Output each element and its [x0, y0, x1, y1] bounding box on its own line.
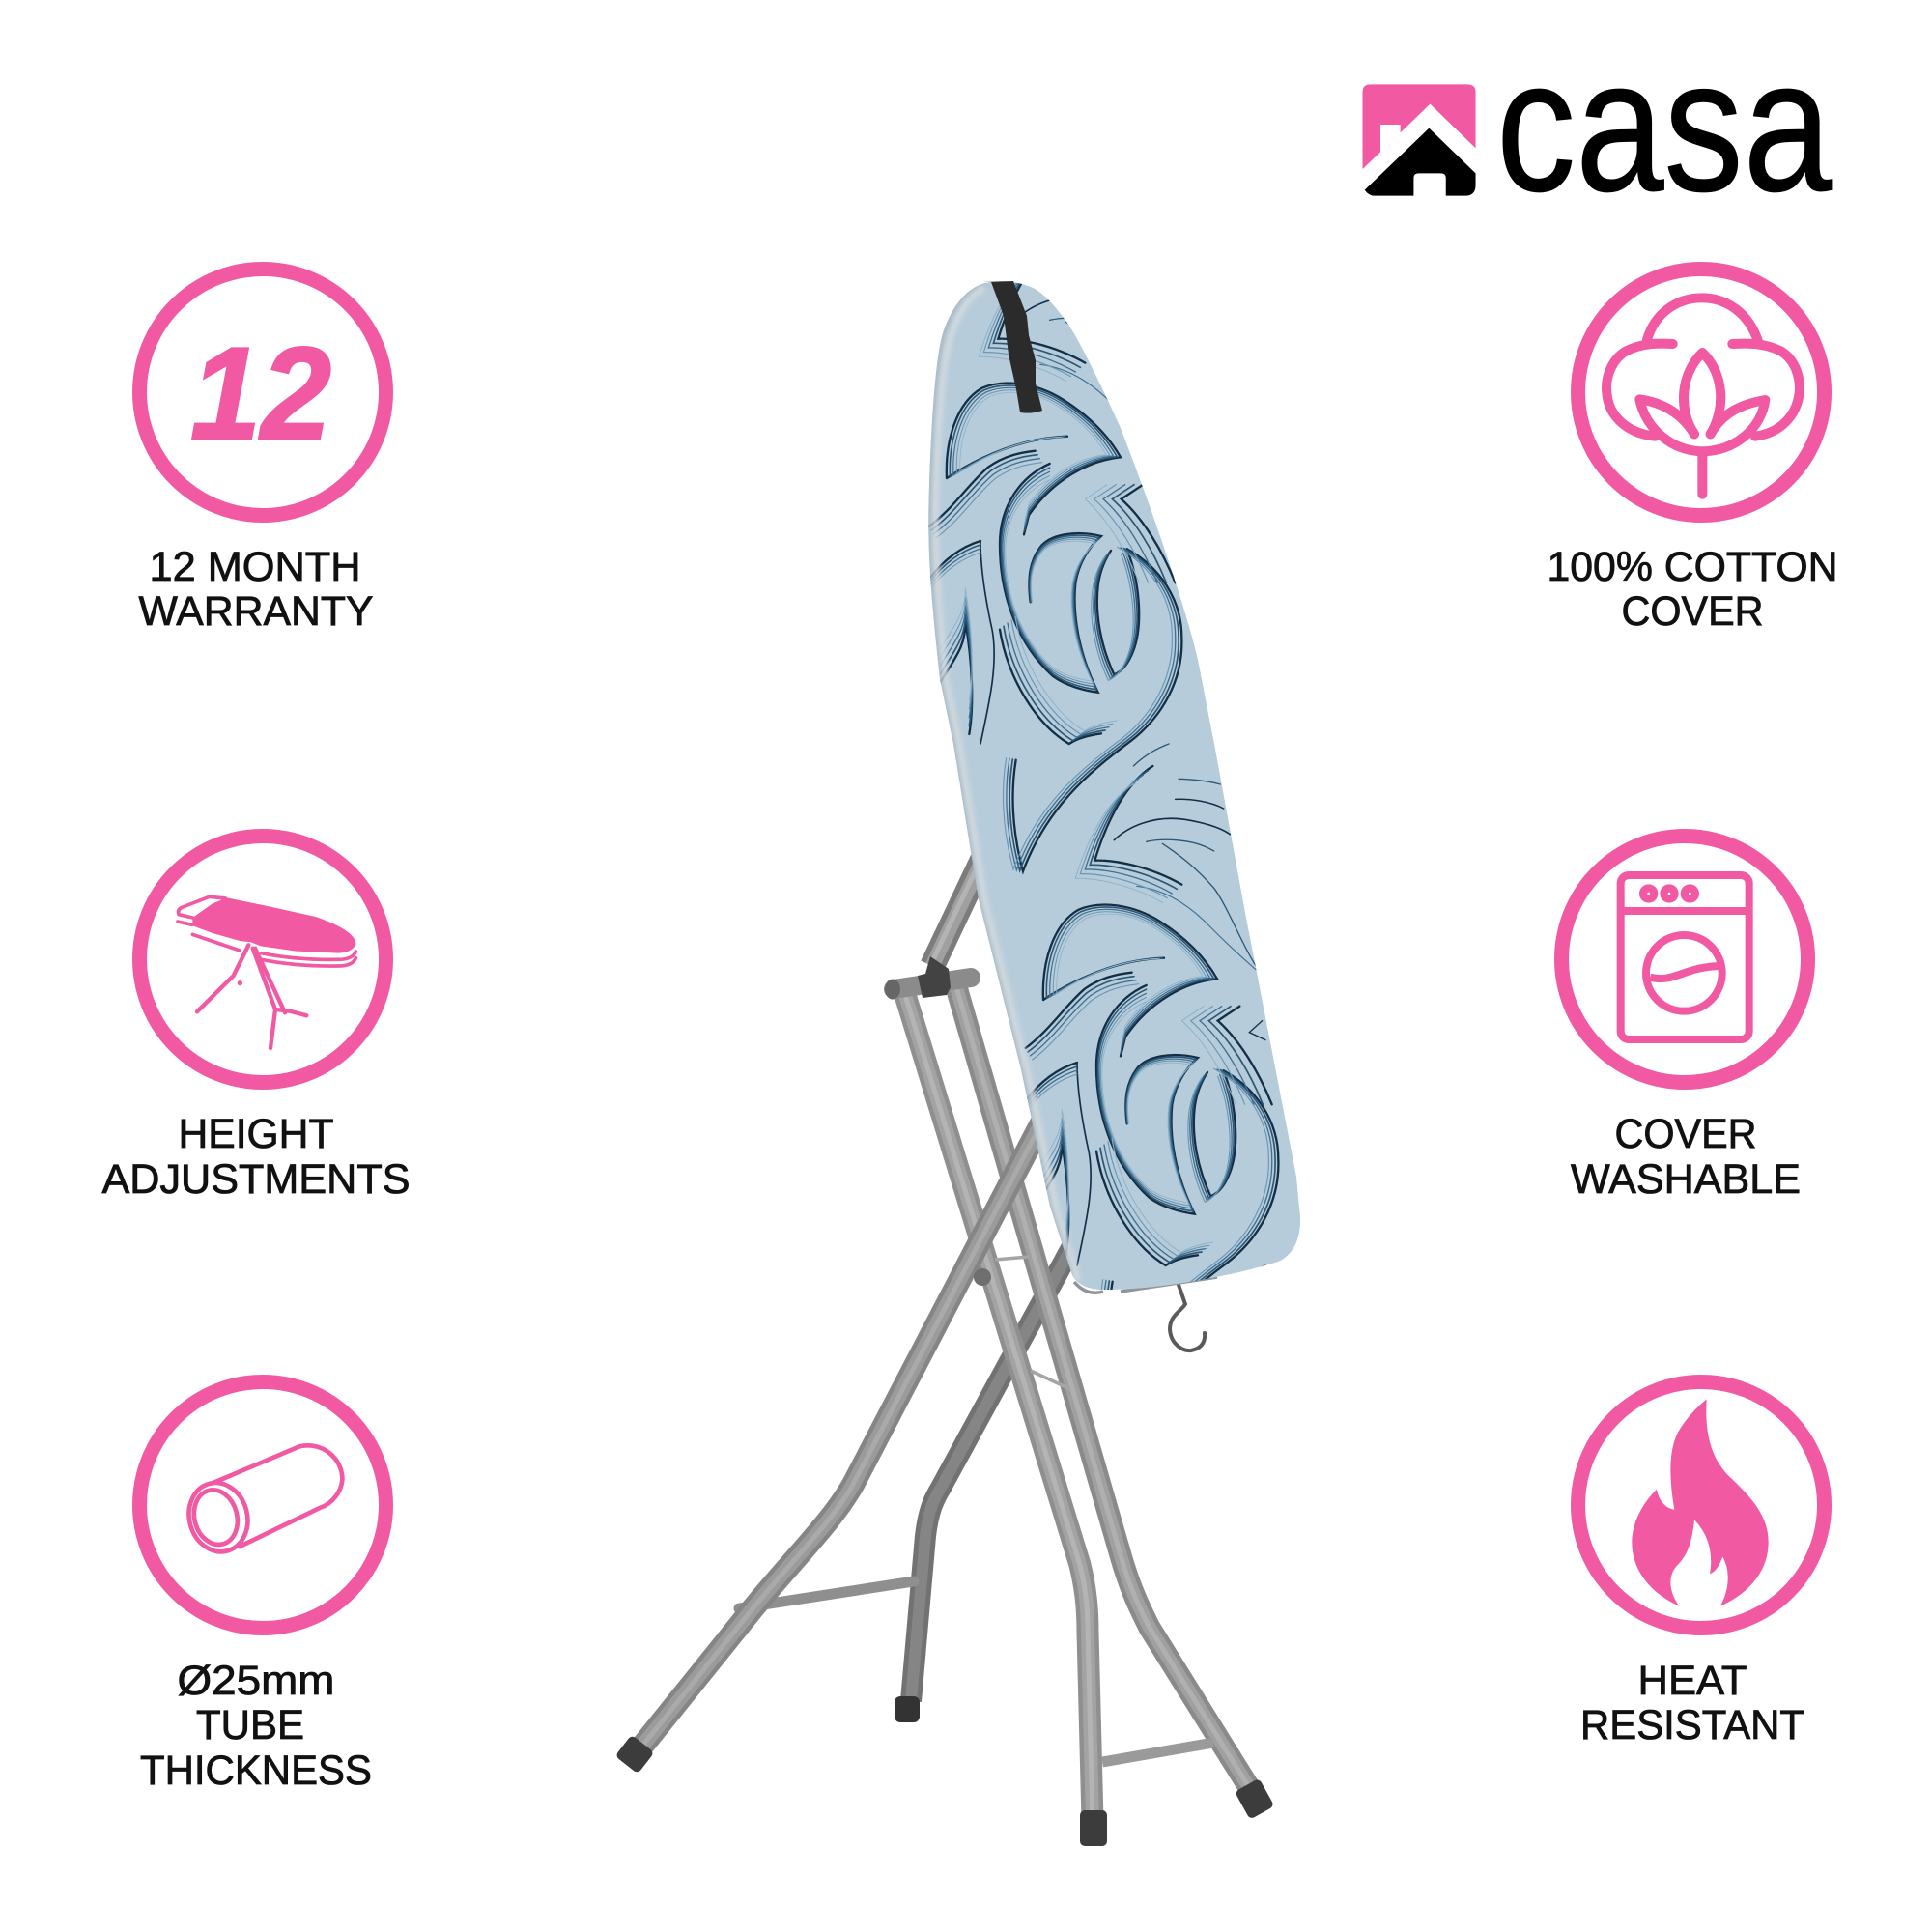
stand: front diagonal leg	[643, 1092, 1058, 1745]
stand: top cross bar	[885, 978, 971, 999]
label: HEAT	[1638, 1658, 1747, 1704]
icon: ironing board	[139, 837, 386, 1082]
foot: left	[615, 1735, 654, 1774]
strap	[983, 281, 1042, 413]
feature: cover washable	[1561, 837, 1808, 1203]
feature: 12 month warranty	[139, 269, 386, 635]
logo icon: house	[1363, 84, 1476, 196]
label: Ø25mm	[178, 1658, 334, 1704]
logo: casa	[1363, 20, 1832, 231]
foot: right	[1235, 1778, 1274, 1820]
foot: back	[895, 1696, 920, 1722]
label: 100% COTTON	[1548, 544, 1837, 590]
icon: cotton	[1578, 269, 1824, 516]
stand: inner leg	[905, 995, 1093, 1821]
hook	[1170, 1282, 1205, 1350]
label: COVER	[1621, 588, 1764, 635]
icon: washing machine	[1561, 837, 1808, 1082]
label: RESISTANT	[1580, 1702, 1804, 1748]
label: ADJUSTMENTS	[102, 1156, 410, 1203]
feature: height adjustments	[102, 837, 410, 1203]
label: THICKNESS	[140, 1747, 372, 1794]
stand: thin wires	[995, 1257, 1070, 1389]
product: ironing board stand	[615, 860, 1274, 1846]
label: WASHABLE	[1571, 1156, 1801, 1203]
board clips	[1074, 1277, 1217, 1293]
foot: front	[1080, 1810, 1107, 1846]
label: HEIGHT	[178, 1111, 334, 1157]
label: 12 MONTH	[149, 544, 361, 590]
stand: pivot joint	[974, 1268, 991, 1286]
icon: tube	[139, 1381, 386, 1629]
logo wordmark: casa	[1496, 20, 1832, 231]
stand: rear cross bar	[1102, 1743, 1213, 1762]
stand: collar	[918, 956, 951, 998]
stand: upper support tube	[930, 860, 982, 966]
icon: 12 badge	[139, 269, 386, 516]
feature: heat resistant	[1578, 1381, 1824, 1748]
stand: outer leg	[954, 980, 1252, 1792]
label: TUBE	[196, 1702, 304, 1748]
icon: flame	[1578, 1381, 1824, 1629]
ironing board	[928, 281, 1300, 1290]
icon: 12 badge: 12	[190, 320, 331, 467]
feature: cotton cover	[1548, 269, 1837, 635]
label: WARRANTY	[139, 588, 373, 635]
board print pattern	[833, 0, 1362, 1562]
label: COVER	[1615, 1111, 1756, 1157]
stand: back leg	[911, 1246, 1072, 1701]
feature: tube thickness	[139, 1381, 386, 1794]
stand: lower cross bar	[739, 1581, 914, 1608]
